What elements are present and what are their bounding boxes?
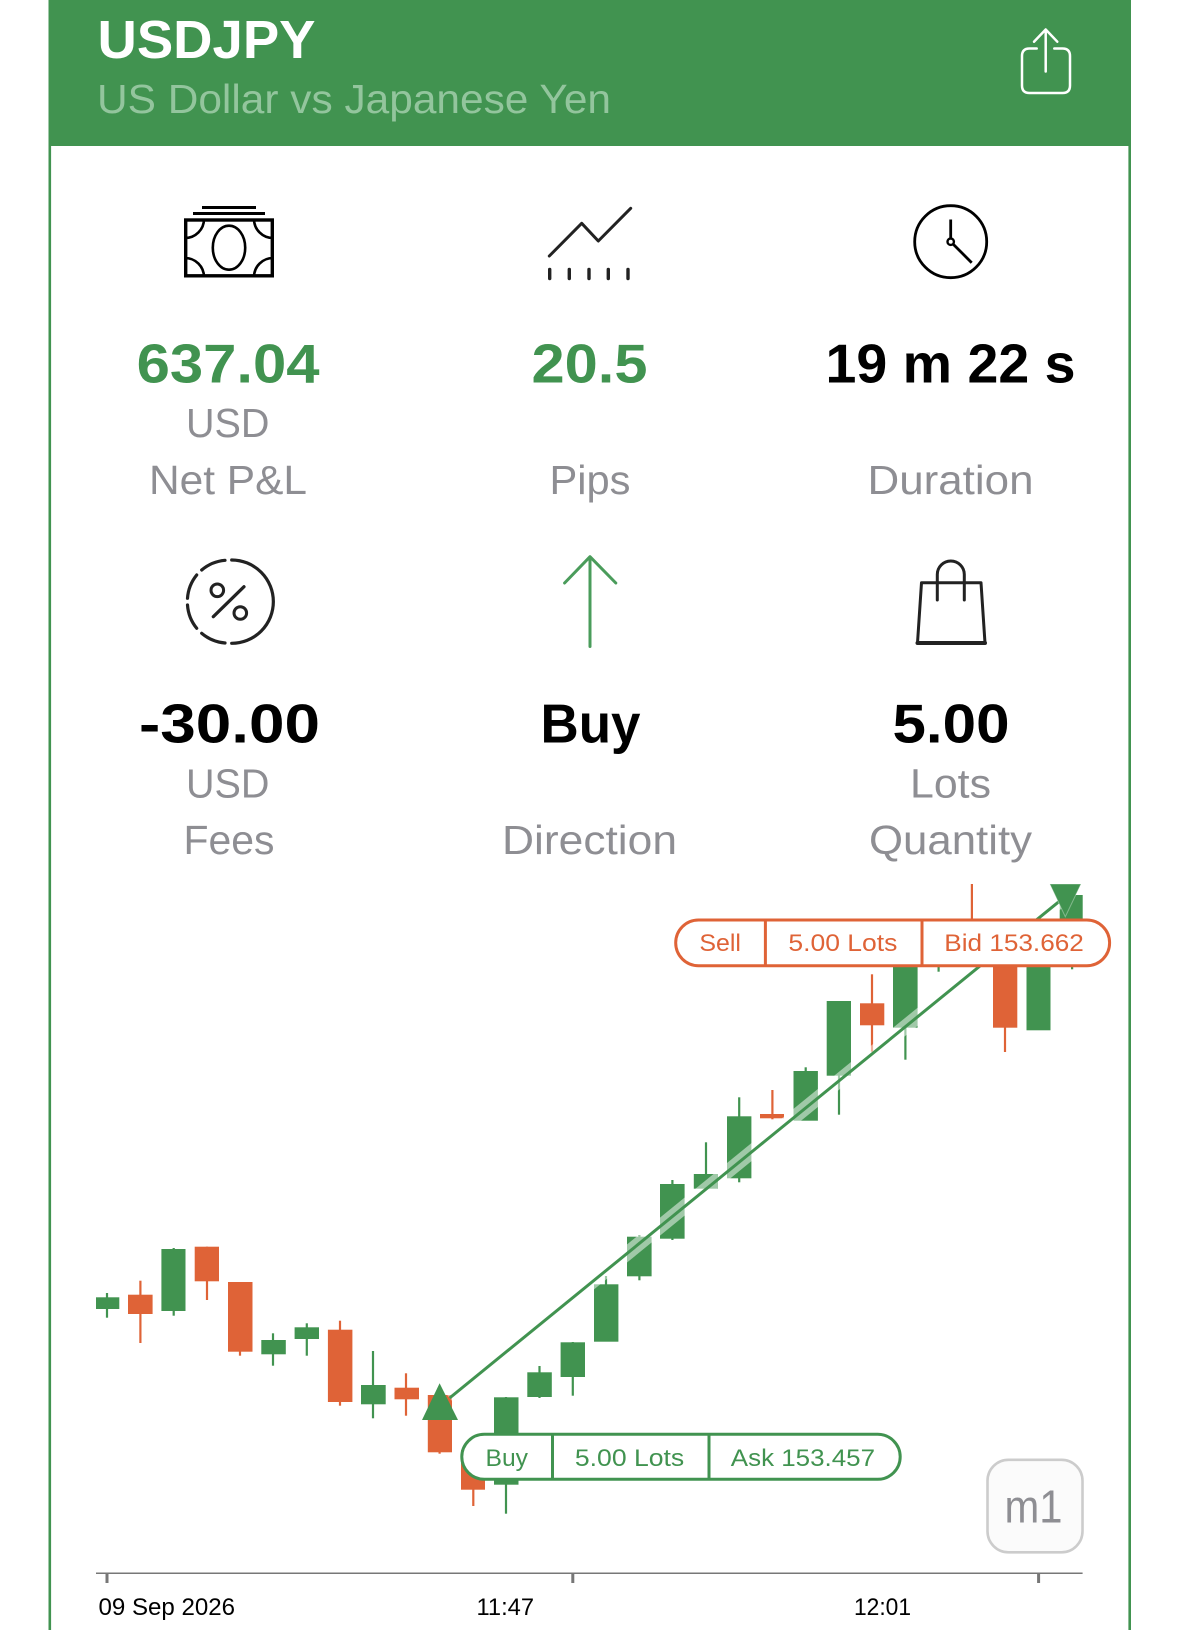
icon: shopping bag [918, 561, 985, 643]
time axis [96, 1573, 1083, 1621]
axis time 12:01: 12:01 [854, 1594, 911, 1621]
axis date: 09 Sep 2026 [98, 1594, 235, 1621]
metric: net P&L [137, 208, 320, 503]
metric: fees [139, 560, 320, 863]
sell marker [1050, 884, 1081, 917]
timeframe button: m1 [1004, 1481, 1062, 1533]
icon: clock [915, 206, 987, 278]
timeframe button [988, 1460, 1082, 1552]
icon: percent badge [188, 560, 273, 643]
metric: direction [502, 557, 677, 863]
unit: Lots [910, 761, 991, 807]
metric: pips [532, 208, 648, 503]
icon: up arrow [565, 557, 616, 646]
value: -30.00 [139, 692, 320, 754]
icon: share [1022, 30, 1070, 93]
unit: USD [186, 400, 270, 446]
value: Buy [540, 692, 641, 754]
trade line [450, 897, 1065, 1398]
candlestick chart [96, 884, 1083, 1514]
icon: banknote [185, 208, 273, 277]
sell label: Sell [699, 930, 741, 957]
value: 637.04 [137, 332, 320, 394]
axis time 11:47: 11:47 [476, 1594, 534, 1621]
ask price: Ask 153.457 [731, 1445, 875, 1472]
falling candles [128, 884, 1017, 1506]
metric: duration [826, 206, 1076, 503]
value: 20.5 [532, 332, 648, 394]
label: Net P&L [149, 457, 307, 503]
bid price: Bid 153.662 [944, 930, 1084, 957]
title: USDJPY [98, 10, 316, 70]
label: Fees [184, 817, 274, 863]
header bar [48, 0, 1131, 146]
label: Duration [868, 457, 1034, 503]
unit: USD [186, 761, 270, 807]
buy marker [422, 1383, 458, 1420]
buy lots: 5.00 Lots [575, 1445, 684, 1472]
value: 5.00 [892, 692, 1010, 754]
label: Quantity [869, 817, 1033, 863]
label: Pips [550, 457, 630, 503]
subtitle: US Dollar vs Japanese Yen [97, 76, 611, 122]
label: Direction [502, 817, 677, 863]
rising candles [96, 890, 1083, 1514]
metric: quantity [869, 561, 1033, 863]
icon: line chart [549, 208, 631, 278]
sell order pill [676, 920, 1110, 966]
sell lots: 5.00 Lots [788, 930, 897, 957]
value: 19 m 22 s [826, 332, 1076, 394]
buy label: Buy [486, 1445, 528, 1472]
buy order pill [462, 1434, 900, 1479]
